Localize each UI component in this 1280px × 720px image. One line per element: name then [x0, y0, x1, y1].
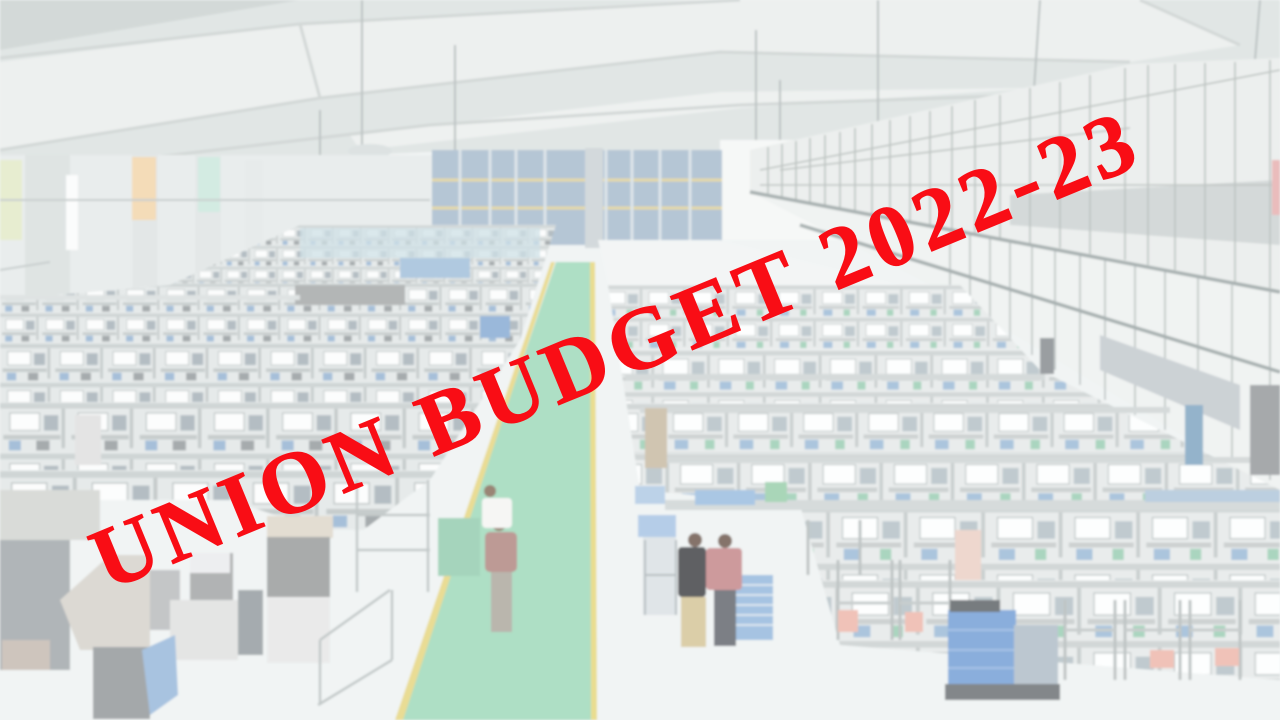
ceiling — [0, 0, 1280, 190]
left machines — [0, 480, 480, 719]
walkway — [395, 262, 597, 720]
person: walkway front — [485, 517, 517, 632]
pair of people at right — [678, 533, 742, 647]
title: Union Budget 2022-23: UNION BUDGET 2022-23 — [78, 91, 1154, 609]
right floor — [598, 240, 900, 285]
other workers — [1185, 405, 1203, 465]
right wall windows — [750, 58, 1280, 490]
left workstation rows — [0, 224, 556, 530]
people — [482, 338, 1203, 647]
person: walkway rear — [482, 485, 512, 528]
right workstation rows — [600, 285, 1280, 684]
blue crates — [945, 600, 1060, 700]
back wall and racks — [0, 124, 950, 330]
